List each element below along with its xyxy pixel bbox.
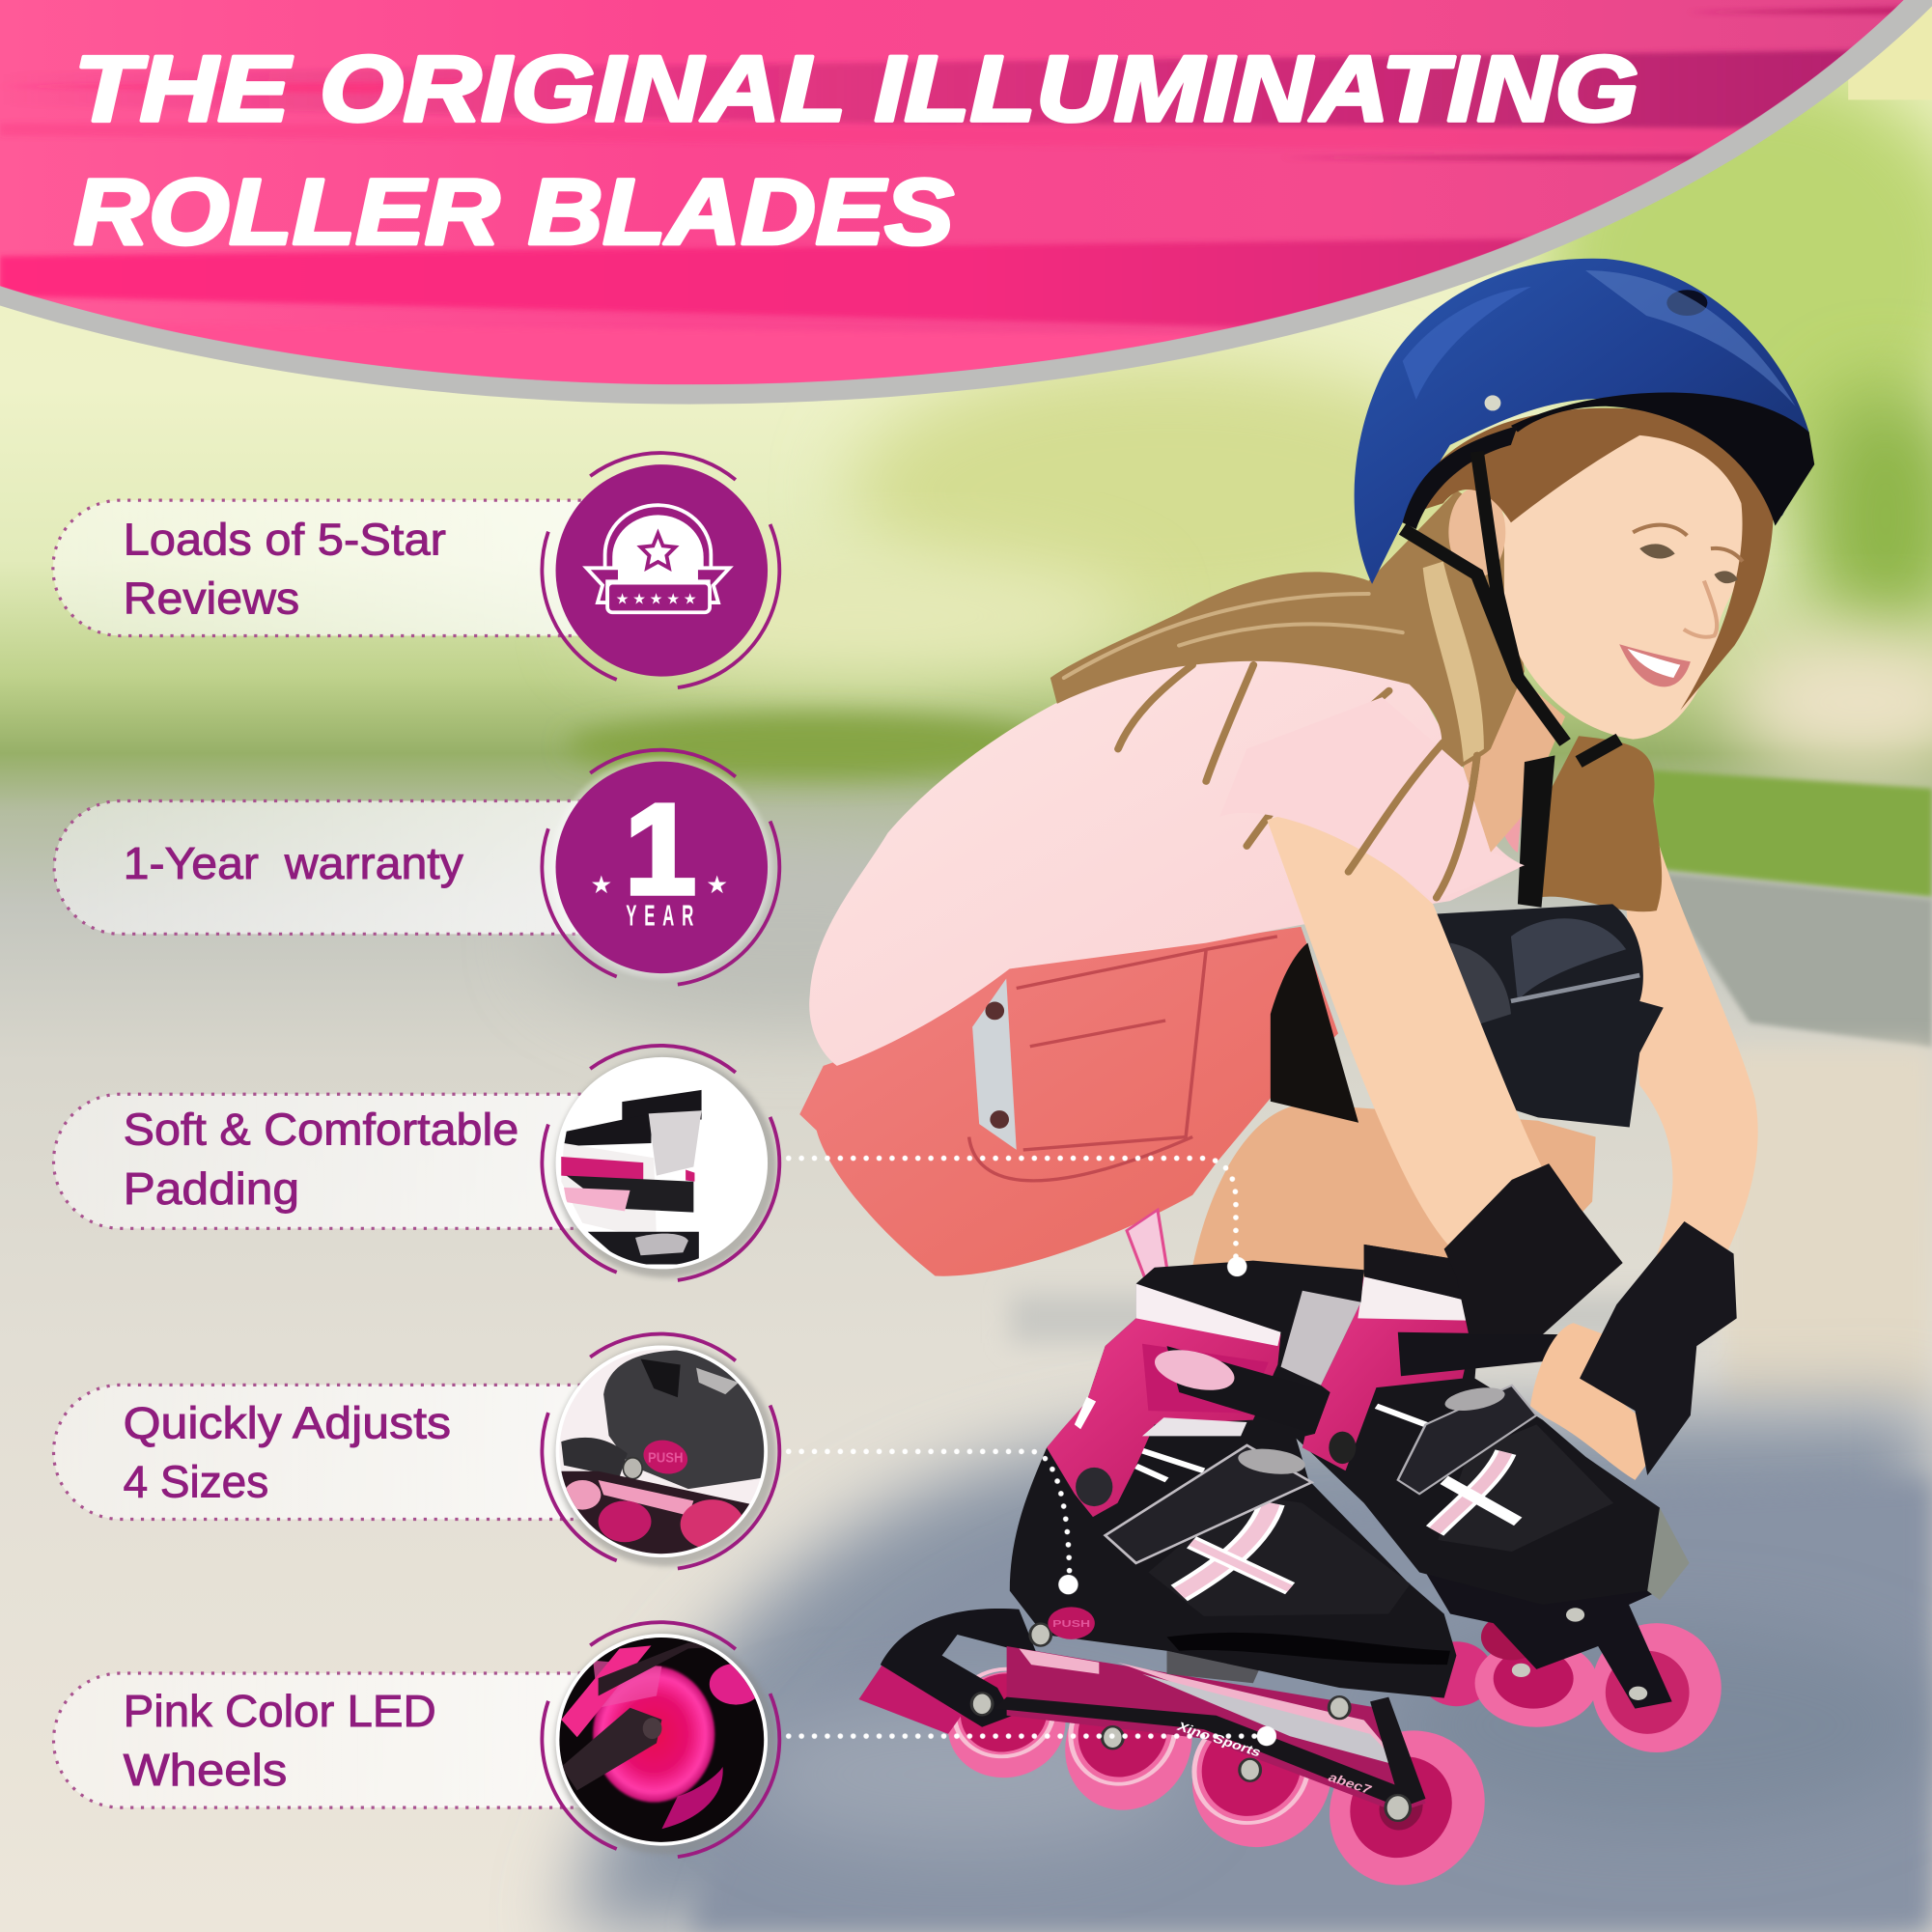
panel: reviews feature	[53, 453, 779, 687]
near skate brake	[858, 1665, 969, 1734]
leader: sizing	[789, 1451, 1070, 1583]
near skate silhouette	[1010, 1261, 1456, 1698]
helmet	[1355, 259, 1814, 584]
title: ROLLER BLADES	[74, 159, 954, 265]
chin straps	[1403, 452, 1619, 762]
sleeve hair strands	[1349, 742, 1477, 898]
reviews text: Reviews	[124, 574, 299, 624]
sizing text	[124, 1397, 451, 1507]
padding text: Soft & Comfortable	[124, 1105, 518, 1155]
panel: padding feature	[54, 1046, 779, 1280]
frame text: Xino Sports	[1174, 1721, 1264, 1760]
pill outline	[54, 1094, 592, 1228]
leg	[1192, 1105, 1596, 1318]
icon: one year badge	[542, 750, 779, 985]
icon: five star badge	[542, 453, 779, 687]
icon: five star badge: ★★★★★	[616, 591, 700, 607]
rear skate wheels	[1419, 1614, 1722, 1752]
near skate velcro strap	[1106, 1445, 1311, 1563]
neck	[1464, 652, 1565, 853]
wrist brace	[1580, 1221, 1737, 1475]
padding text	[124, 1105, 518, 1214]
LED wheels text: Pink Color LED	[124, 1686, 436, 1736]
panel: warranty feature	[54, 750, 779, 985]
near skate heel	[881, 1609, 1038, 1727]
eyes, nose and smile	[1619, 525, 1743, 686]
panel: sizing feature	[54, 1334, 779, 1572]
leader: padding	[789, 1159, 1236, 1257]
shirt sleeve	[1219, 697, 1525, 901]
rear boot stripes	[1376, 1406, 1518, 1530]
face	[1504, 429, 1748, 740]
icon: one year badge: 1	[625, 778, 696, 921]
ear	[1448, 487, 1505, 577]
hair streaming left	[1050, 490, 1525, 898]
rear skate cuff	[1302, 1276, 1475, 1470]
knee pads	[1437, 904, 1664, 1127]
shorts	[799, 927, 1338, 1276]
pill outline	[54, 1673, 592, 1807]
shirt	[809, 653, 1525, 1066]
back arm	[1626, 795, 1758, 1292]
title: THE ORIGINAL ILLUMINATING	[74, 36, 1638, 141]
near skate wheels	[938, 1664, 1498, 1892]
reviews text	[124, 514, 446, 624]
illustration: girl crouching	[799, 259, 1814, 1318]
pill outline	[54, 800, 592, 934]
LED wheels text: Wheels	[124, 1745, 287, 1795]
icon: one year badge: ★	[706, 872, 728, 899]
callout end dots	[1058, 1257, 1276, 1746]
near skate mesh	[1148, 1494, 1411, 1616]
panel: LED wheels feature	[54, 1622, 779, 1857]
hair back right	[1538, 736, 1662, 911]
near skate cuff	[1047, 1318, 1281, 1517]
near skate bolts	[971, 1693, 1411, 1821]
photo: boot padding	[542, 1046, 779, 1280]
push button	[1048, 1607, 1095, 1639]
banner grey edge	[0, 0, 1932, 405]
photo: glowing wheel	[542, 1622, 779, 1857]
sizing text: 4 Sizes	[124, 1457, 268, 1507]
near arm	[1267, 816, 1541, 1260]
title	[74, 36, 1638, 265]
photo: push adjuster	[542, 1334, 779, 1572]
pill outline	[53, 500, 592, 635]
pocket seams	[972, 978, 1017, 1150]
near skate	[858, 1210, 1498, 1892]
rear skate	[1297, 1245, 1722, 1752]
pill outline	[54, 1385, 592, 1519]
wrist guard	[1444, 1163, 1623, 1334]
warranty text: 1-Year warranty	[124, 838, 463, 888]
near skate frame	[994, 1646, 1426, 1812]
reviews text: Loads of 5-Star	[124, 514, 446, 564]
LED wheels text	[124, 1686, 436, 1795]
callout leader lines	[789, 1159, 1263, 1736]
padding text: Padding	[124, 1163, 299, 1214]
near skate strap loop	[1127, 1210, 1167, 1279]
icon: one year badge: ★	[590, 872, 612, 899]
black leggings	[1271, 943, 1358, 1123]
near skate pale stripes	[1133, 1447, 1290, 1593]
rear frame	[1426, 1572, 1672, 1709]
photo: push adjuster: PUSH	[648, 1449, 684, 1466]
near skate lower bolts	[1030, 1624, 1350, 1719]
near skate ankle strap	[1167, 1346, 1330, 1434]
push button: PUSH	[1052, 1618, 1090, 1629]
near skate tongue	[1281, 1291, 1361, 1386]
illustration: inline skates	[858, 1163, 1737, 1892]
leader: wheels	[789, 1734, 1263, 1738]
banner pink body	[0, 0, 1932, 406]
hair fringe	[1403, 408, 1774, 711]
icon: one year badge: YEAR	[626, 900, 701, 933]
hand	[1530, 1323, 1666, 1480]
rear boot silhouette	[1297, 1245, 1678, 1605]
sizing text: Quickly Adjusts	[124, 1397, 451, 1447]
header banner	[0, 0, 1932, 406]
near skate frame: abec7	[1326, 1771, 1374, 1797]
